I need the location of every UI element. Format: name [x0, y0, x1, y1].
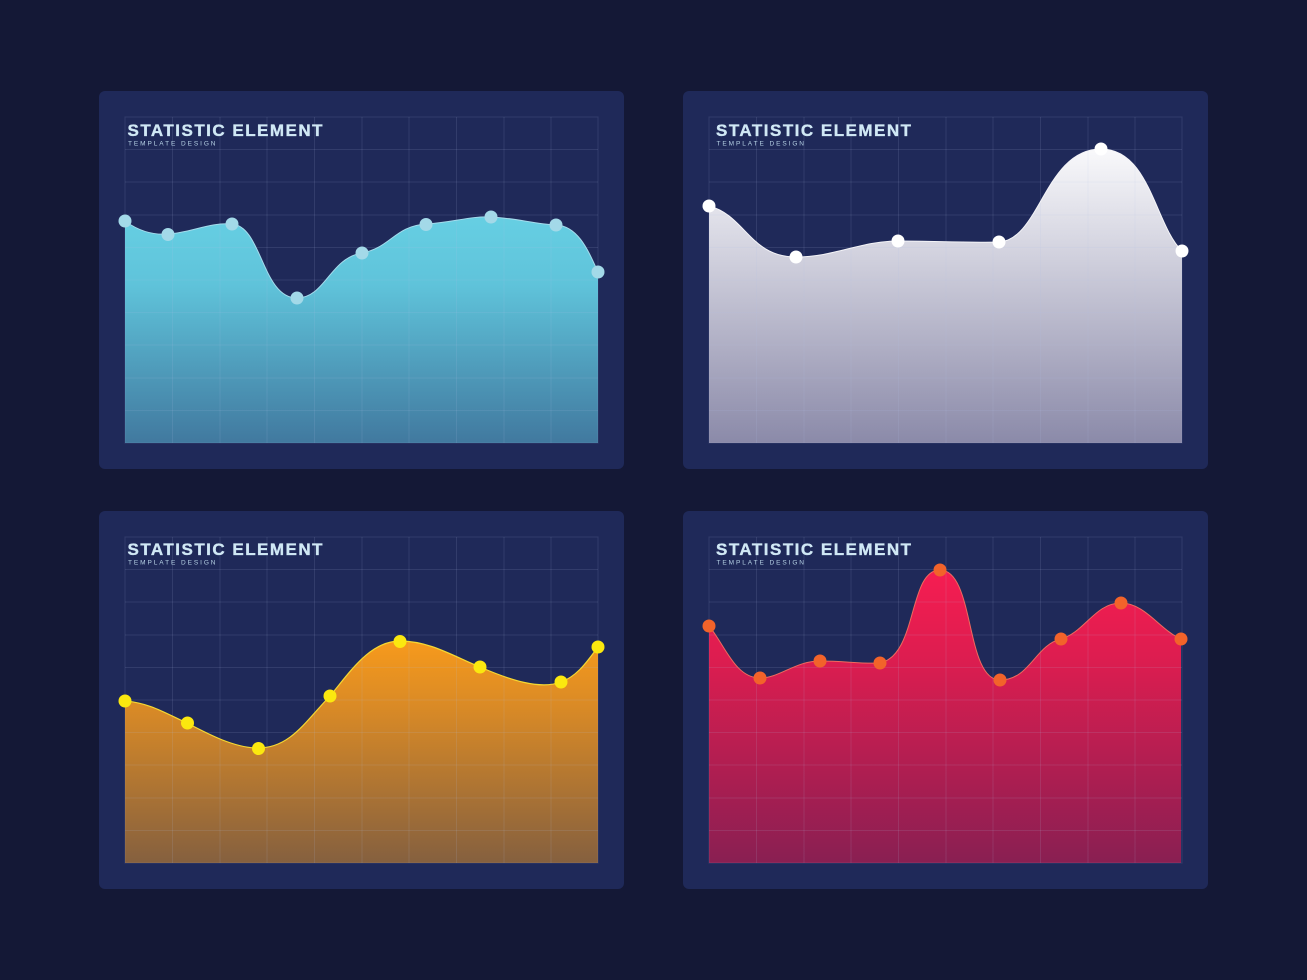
- panel: blue area chart: [99, 91, 624, 469]
- panel background orange: [99, 511, 624, 889]
- heading white: STATISTIC ELEMENT: [716, 121, 912, 140]
- data points blue: [118, 210, 604, 304]
- grid red: [709, 537, 1182, 863]
- curve line red: [709, 570, 1181, 680]
- area fill blue: [125, 217, 598, 443]
- heading red: STATISTIC ELEMENT: [716, 540, 912, 559]
- subheading white: TEMPLATE DESIGN: [716, 140, 804, 148]
- heading blue: STATISTIC ELEMENT: [128, 121, 323, 140]
- grid orange: [125, 537, 598, 863]
- curve line orange: [125, 641, 598, 748]
- data points orange: [118, 635, 604, 755]
- panel: white area chart: [683, 91, 1208, 469]
- data points white: [702, 142, 1188, 264]
- heading orange: STATISTIC ELEMENT: [128, 540, 323, 559]
- subheading blue: TEMPLATE DESIGN: [128, 140, 216, 148]
- panel background blue: [99, 91, 624, 469]
- panel background white: [683, 91, 1208, 469]
- area fill orange: [125, 641, 598, 863]
- subheading red: TEMPLATE DESIGN: [716, 560, 804, 566]
- curve line blue: [125, 217, 598, 298]
- curve line white: [709, 149, 1182, 257]
- grid white: [709, 117, 1182, 443]
- subheading orange: TEMPLATE DESIGN: [128, 560, 216, 566]
- data points red: [702, 564, 1188, 686]
- panel: orange area chart: [99, 511, 624, 889]
- area fill red: [709, 570, 1181, 863]
- grid blue: [125, 117, 598, 443]
- panel background red: [683, 511, 1208, 889]
- panel: red area chart: [683, 511, 1208, 889]
- area fill white: [709, 149, 1182, 443]
